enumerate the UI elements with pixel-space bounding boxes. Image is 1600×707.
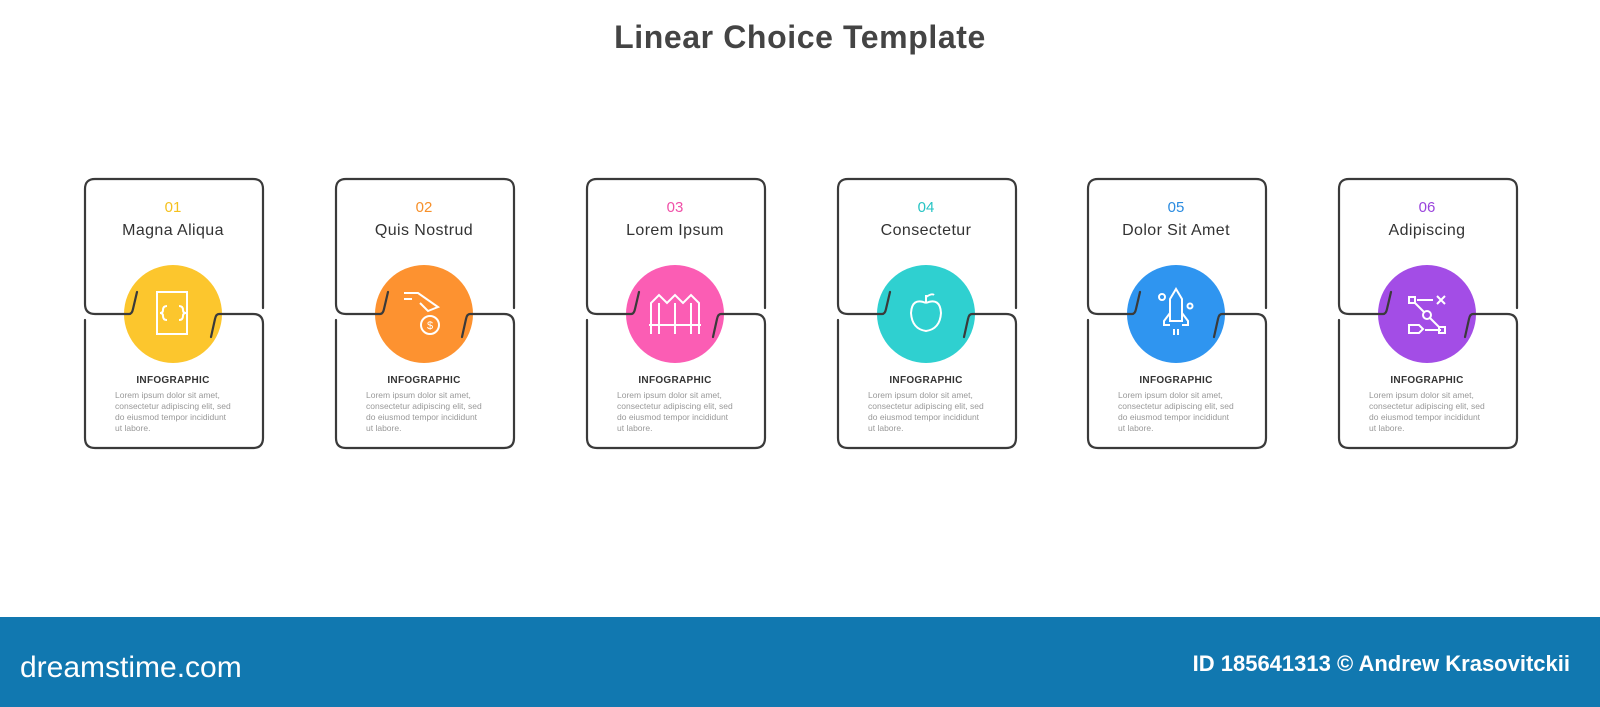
icon: scroll <box>157 292 187 334</box>
card 1: consectetur adipiscing elit, sed <box>115 401 231 411</box>
card 3: consectetur adipiscing elit, sed <box>617 401 733 411</box>
card 4 <box>838 179 1016 448</box>
footer logo: dreamstime.com <box>20 651 242 684</box>
card 2: $ <box>427 320 433 332</box>
card 1: do eiusmod tempor incididunt <box>115 412 227 422</box>
card 5: Lorem ipsum dolor sit amet, <box>1118 390 1223 400</box>
card 6: do eiusmod tempor incididunt <box>1369 412 1481 422</box>
card 3: Lorem ipsum dolor sit amet, <box>617 390 722 400</box>
card 6: INFOGRAPHIC <box>1390 375 1464 386</box>
card 1: ut labore. <box>115 423 150 433</box>
card 2: INFOGRAPHIC <box>387 375 461 386</box>
card 1: 01 <box>165 199 181 216</box>
card 5: 05 <box>1168 199 1184 216</box>
card 5: consectetur adipiscing elit, sed <box>1118 401 1234 411</box>
card 4: consectetur adipiscing elit, sed <box>868 401 984 411</box>
card 2 <box>336 179 514 448</box>
card 6: 06 <box>1419 199 1435 216</box>
title: Linear Choice Template <box>614 19 986 55</box>
card 4: INFOGRAPHIC <box>889 375 963 386</box>
card 2: do eiusmod tempor incididunt <box>366 412 478 422</box>
card 5 <box>1088 179 1266 448</box>
card 5: Dolor Sit Amet <box>1122 222 1230 239</box>
card 6: Lorem ipsum dolor sit amet, <box>1369 390 1474 400</box>
card 1: Magna Aliqua <box>122 222 224 239</box>
card 2: Lorem ipsum dolor sit amet, <box>366 390 471 400</box>
card 4: 04 <box>918 199 934 216</box>
icon: hand coin <box>404 293 439 334</box>
card 2: consectetur adipiscing elit, sed <box>366 401 482 411</box>
icon: path tool <box>1409 296 1445 333</box>
icon: buildings <box>649 295 701 334</box>
card 3: do eiusmod tempor incididunt <box>617 412 729 422</box>
card 1: Lorem ipsum dolor sit amet, <box>115 390 220 400</box>
card 3: Lorem Ipsum <box>626 222 724 239</box>
card 4: do eiusmod tempor incididunt <box>868 412 980 422</box>
card 2: 02 <box>416 199 432 216</box>
card 4: Consectetur <box>881 222 972 239</box>
footer band <box>0 617 1600 707</box>
card 5: ut labore. <box>1118 423 1153 433</box>
card 5: INFOGRAPHIC <box>1139 375 1213 386</box>
card 4: ut labore. <box>868 423 903 433</box>
card 3 <box>587 179 765 448</box>
card 6: consectetur adipiscing elit, sed <box>1369 401 1485 411</box>
card 3: ut labore. <box>617 423 652 433</box>
card 1: INFOGRAPHIC <box>136 375 210 386</box>
icon: apple <box>911 294 941 331</box>
card 1 <box>85 179 263 448</box>
card 6 <box>1339 179 1517 448</box>
card 2: ut labore. <box>366 423 401 433</box>
card 6: ut labore. <box>1369 423 1404 433</box>
card 2: Quis Nostrud <box>375 222 473 239</box>
footer credit: ID 185641313 © Andrew Krasovitckii <box>1193 651 1570 676</box>
icon: rocket <box>1159 289 1192 335</box>
card 3: INFOGRAPHIC <box>638 375 712 386</box>
card 3: 03 <box>667 199 683 216</box>
card 6: Adipiscing <box>1389 222 1465 239</box>
card 4: Lorem ipsum dolor sit amet, <box>868 390 973 400</box>
card 5: do eiusmod tempor incididunt <box>1118 412 1230 422</box>
